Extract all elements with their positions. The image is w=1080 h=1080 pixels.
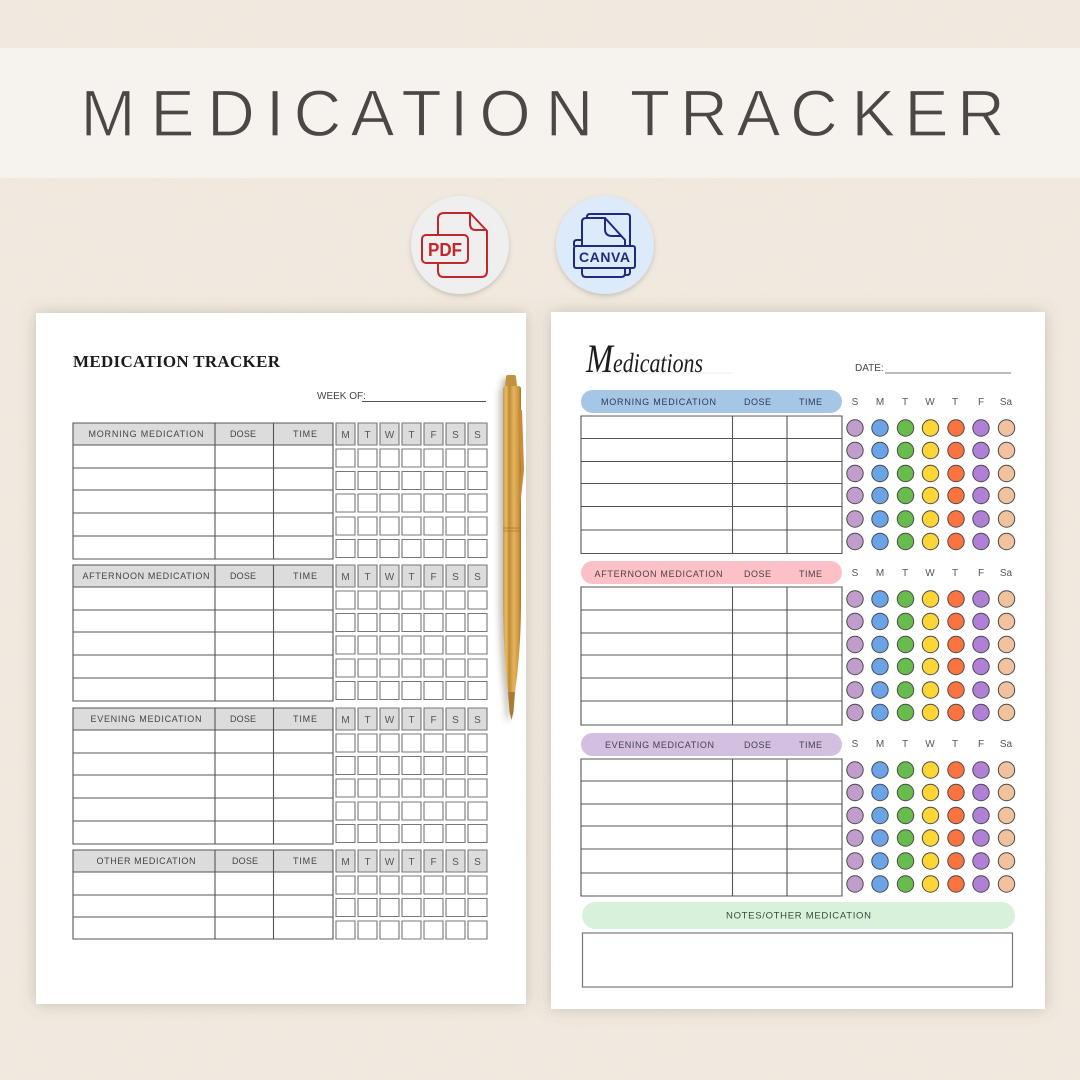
other section: OTHER MEDICATION <box>96 856 196 866</box>
other section: DOSE <box>232 856 258 866</box>
evening block: EVENING MEDICATION <box>605 740 714 750</box>
morning block: TIME <box>799 397 822 407</box>
morning block: SMTWTF <box>852 397 984 408</box>
icon: Canva badge: CANVA <box>579 249 630 265</box>
other section <box>73 850 487 939</box>
title: MEDICATION TRACKER <box>81 76 1005 150</box>
evening section <box>73 708 487 844</box>
afternoon block <box>581 561 1015 725</box>
morning section <box>73 423 487 559</box>
morning section: DOSE <box>230 429 256 439</box>
afternoon section <box>73 565 487 701</box>
right page script heading: Medications <box>585 336 703 381</box>
afternoon section: MTWTFSS <box>341 572 481 583</box>
panel: left tracker page <box>36 313 526 1004</box>
icon: PDF badge <box>411 196 509 294</box>
morning section: MTWTFSS <box>341 430 481 441</box>
morning block: Sa <box>1000 397 1013 408</box>
week of field: WEEK OF: <box>317 391 366 402</box>
evening section: EVENING MEDICATION <box>90 714 202 724</box>
morning section: TIME <box>293 429 317 439</box>
afternoon block: AFTERNOON MEDICATION <box>594 569 722 579</box>
evening block: SMTWTF <box>852 739 984 750</box>
afternoon section: AFTERNOON MEDICATION <box>82 571 210 581</box>
other section: TIME <box>293 856 317 866</box>
afternoon section: DOSE <box>230 571 256 581</box>
notes block: NOTES/OTHER MEDICATION <box>726 910 871 922</box>
evening section: TIME <box>293 714 317 724</box>
evening block <box>581 733 1015 896</box>
evening block: DOSE <box>744 740 771 750</box>
notes block <box>582 902 1015 987</box>
morning block: MORNING MEDICATION <box>601 397 716 407</box>
morning block <box>581 390 1015 554</box>
evening section: DOSE <box>230 714 256 724</box>
evening section: MTWTFSS <box>341 715 481 726</box>
afternoon block: Sa <box>1000 568 1013 579</box>
other section: MTWTFSS <box>341 857 481 868</box>
evening block: Sa <box>1000 739 1013 750</box>
morning section: MORNING MEDICATION <box>88 429 204 439</box>
afternoon block: DOSE <box>744 569 771 579</box>
afternoon block: SMTWTF <box>852 568 984 579</box>
date field: DATE: <box>855 363 884 374</box>
icon: Canva badge <box>556 196 654 294</box>
icon: PDF badge: PDF <box>428 240 462 260</box>
panel: right colourful page <box>551 312 1045 1009</box>
afternoon section: TIME <box>293 571 317 581</box>
evening block: TIME <box>799 740 822 750</box>
icon: gold pen <box>503 375 524 720</box>
afternoon block: TIME <box>799 569 822 579</box>
title banner <box>0 48 1080 178</box>
left page heading: MEDICATION TRACKER <box>73 352 281 371</box>
morning block: DOSE <box>744 397 771 407</box>
